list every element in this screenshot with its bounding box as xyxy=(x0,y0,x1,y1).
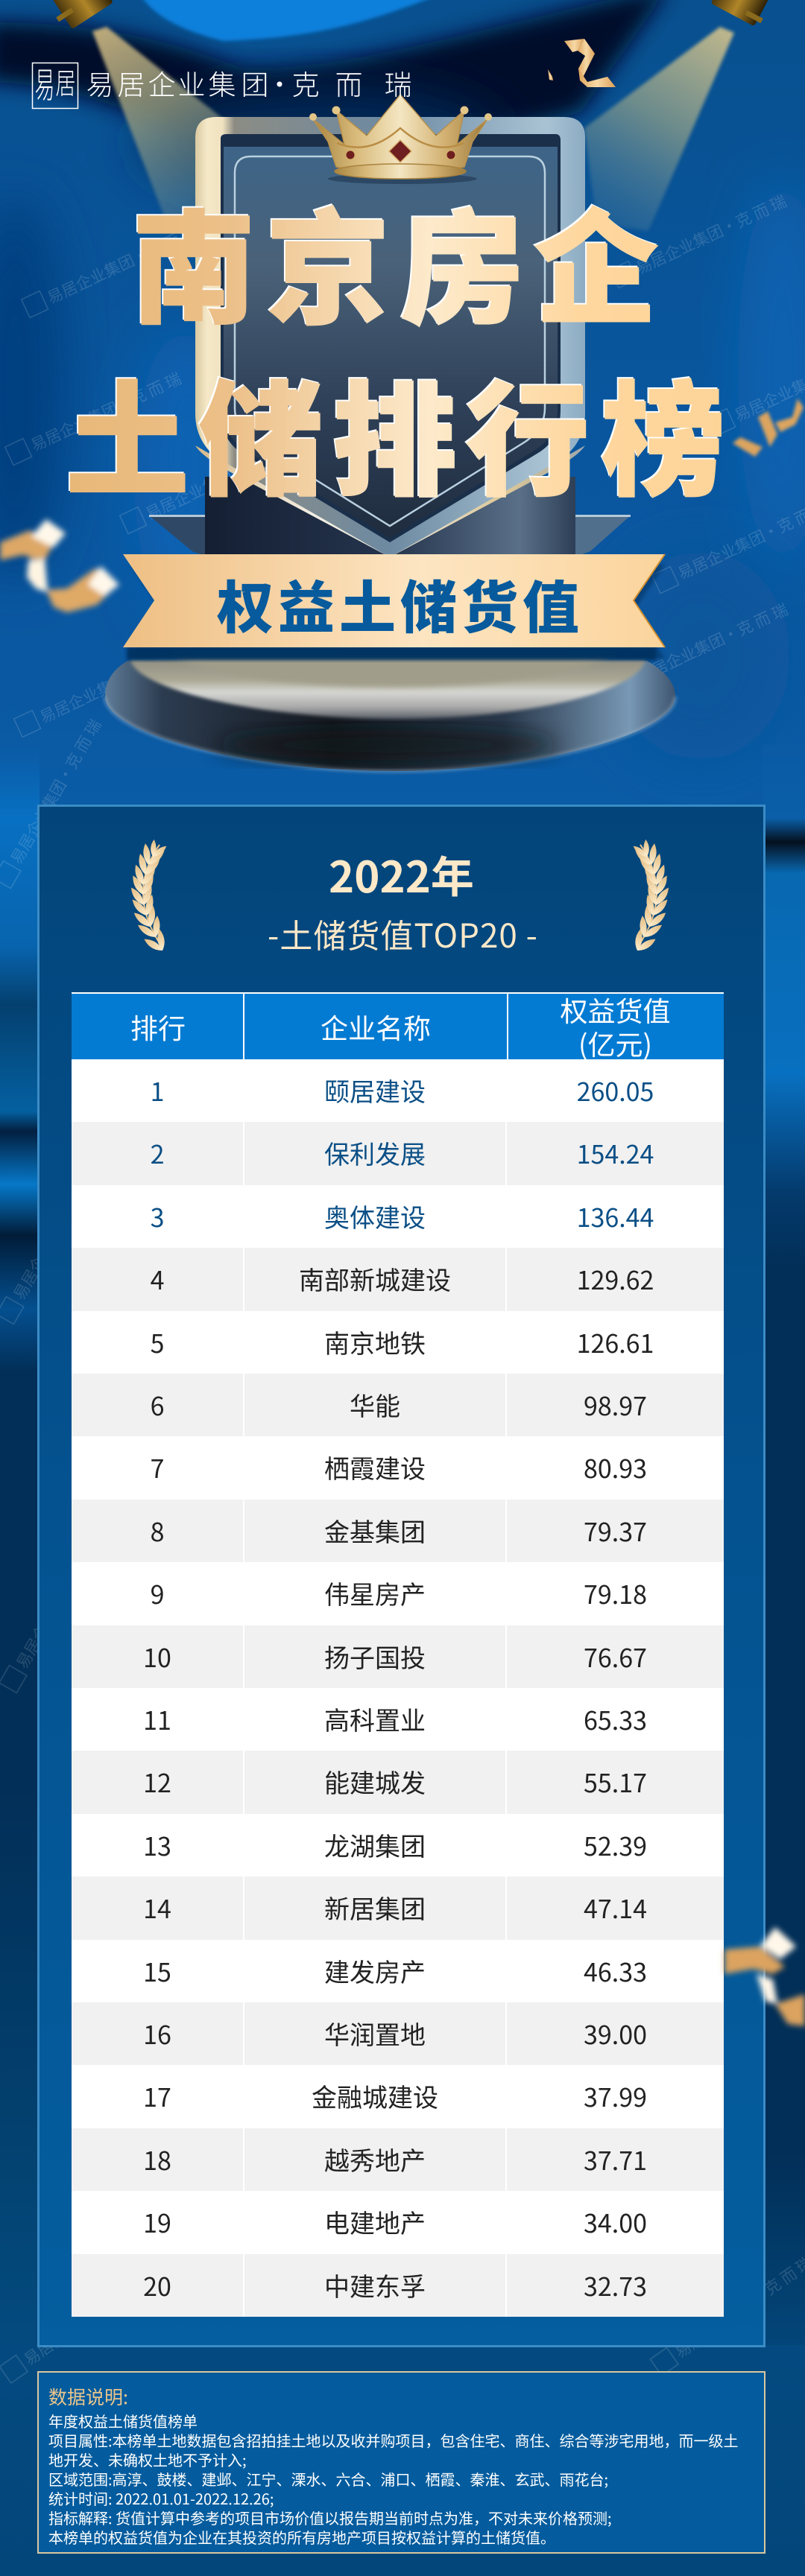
icon: right laurel xyxy=(632,840,672,954)
row 13 xyxy=(143,1827,647,1863)
notes line 4: 区域范围:高淳、鼓楼、建邺、江宁、溧水、六合、浦口、栖霞、秦淮、玄武、雨花台; xyxy=(48,2468,608,2490)
row 19 xyxy=(143,2204,647,2240)
logo xyxy=(33,57,411,109)
row 14: 47.14 xyxy=(584,1889,647,1926)
row 4 xyxy=(72,1248,724,1311)
row 1 xyxy=(151,1072,654,1108)
notes line 7: 本榜单的权益货值为企业在其投资的所有房地产项目按权益计算的土储货值。 xyxy=(48,2526,555,2548)
row 15: 建发房产 xyxy=(324,1952,426,1989)
data notes xyxy=(37,2371,765,2554)
row 20: 中建东孚 xyxy=(324,2267,426,2303)
row 13: 52.39 xyxy=(584,1827,647,1863)
row 17: 17 xyxy=(143,2078,171,2114)
table header: 权益货值 xyxy=(561,989,671,1030)
row 20 xyxy=(72,2254,724,2317)
row 16 xyxy=(72,2002,724,2065)
row 10 xyxy=(72,1625,724,1688)
row 10: 扬子国投 xyxy=(324,1638,426,1675)
row 12: 能建城发 xyxy=(324,1763,426,1800)
row 1: 1 xyxy=(151,1072,164,1108)
row 5: 126.61 xyxy=(577,1324,654,1360)
fabric background: side margins and bottom xyxy=(0,745,805,2576)
row 8 xyxy=(72,1500,724,1562)
row 12 xyxy=(72,1751,724,1814)
row 18: 18 xyxy=(143,2141,171,2177)
subtitle: -土储货值TOP20 - xyxy=(268,910,538,957)
row 3: 3 xyxy=(151,1198,164,1234)
ranking table xyxy=(72,992,724,2317)
confetti ribbon: right xyxy=(733,399,804,457)
row 15: 46.33 xyxy=(584,1952,647,1989)
confetti ribbon: top right xyxy=(548,39,616,87)
table header: 企业名称 xyxy=(321,1006,431,1046)
left spotlight lamp xyxy=(51,0,113,29)
row 6: 华能 xyxy=(350,1386,400,1423)
notes line 6: 指标解释: 货值计算中参考的项目市场价值以报告期当前时点为准，不对未来价格预测; xyxy=(48,2507,612,2528)
main panel xyxy=(37,805,765,2347)
row 17: 37.99 xyxy=(584,2078,647,2114)
row 6 xyxy=(72,1374,724,1436)
row 7 xyxy=(151,1449,647,1485)
row 13: 13 xyxy=(143,1827,171,1863)
row 4: 129.62 xyxy=(577,1260,654,1297)
confetti ribbon: left xyxy=(0,519,119,612)
row 1: 260.05 xyxy=(577,1072,654,1108)
row 14: 14 xyxy=(143,1889,171,1926)
row 17 xyxy=(143,2078,647,2114)
row 19: 19 xyxy=(143,2204,171,2240)
row 7: 80.93 xyxy=(584,1449,647,1485)
row 4: 4 xyxy=(151,1260,164,1297)
row 2 xyxy=(72,1122,724,1185)
row 11: 11 xyxy=(143,1701,171,1737)
icon: left laurel xyxy=(128,840,168,954)
row 3 xyxy=(151,1198,654,1234)
row 19: 34.00 xyxy=(584,2204,647,2240)
title xyxy=(66,169,725,521)
row 9: 9 xyxy=(151,1575,164,1611)
notes line 5: 统计时间: 2022.01.01-2022.12.26; xyxy=(48,2487,274,2509)
row 10: 76.67 xyxy=(584,1638,647,1675)
banner text: 权益土储货值 xyxy=(217,562,579,644)
row 7: 7 xyxy=(151,1449,164,1485)
title line 1: 南京房企 xyxy=(132,169,658,349)
row 16: 华润置地 xyxy=(324,2015,426,2052)
row 8: 金基集团 xyxy=(324,1512,426,1549)
logo mark: 易 xyxy=(34,57,55,109)
row 13: 龙湖集团 xyxy=(324,1827,426,1863)
row 11: 高科置业 xyxy=(324,1701,426,1737)
row 18 xyxy=(72,2128,724,2191)
row 18: 越秀地产 xyxy=(324,2141,426,2177)
row 20: 32.73 xyxy=(584,2267,647,2303)
row 15: 15 xyxy=(143,1952,171,1989)
row 18: 37.71 xyxy=(584,2141,647,2177)
row 2: 2 xyxy=(151,1135,164,1171)
row 7: 栖霞建设 xyxy=(324,1449,426,1485)
row 15 xyxy=(143,1952,647,1989)
row 11 xyxy=(143,1701,647,1737)
row 2: 保利发展 xyxy=(324,1135,426,1171)
notes line 3: 地开发、未确权土地不予计入; xyxy=(48,2449,247,2470)
row 5: 5 xyxy=(151,1324,164,1360)
fabric background: hero xyxy=(0,0,805,812)
trophy pedestal xyxy=(105,647,675,771)
notes line 2: 项目属性:本榜单土地数据包含招拍挂土地以及收并购项目，包含住宅、商住、综合等涉宅用地，而一级土 xyxy=(48,2429,739,2451)
row 9 xyxy=(151,1575,647,1611)
row 14 xyxy=(72,1877,724,1940)
row 8: 8 xyxy=(151,1512,164,1549)
shield base pillar xyxy=(205,477,575,559)
row 19: 电建地产 xyxy=(324,2204,426,2240)
row 9: 79.18 xyxy=(584,1575,647,1611)
shield wings xyxy=(149,515,631,559)
title line 2: 土储排行榜 xyxy=(66,341,725,521)
row 5: 南京地铁 xyxy=(324,1324,426,1360)
row 12: 12 xyxy=(143,1763,171,1800)
logo wordmark: 易居企业集团·克而瑞 xyxy=(86,63,411,103)
ribbon banner xyxy=(123,554,665,659)
right spotlight lamp xyxy=(710,0,772,26)
row 5 xyxy=(151,1324,654,1360)
row 8: 79.37 xyxy=(584,1512,647,1549)
notes heading: 数据说明: xyxy=(48,2383,128,2410)
row 12: 55.17 xyxy=(584,1763,647,1800)
spotlight beams xyxy=(92,27,734,231)
row 3: 奥体建设 xyxy=(324,1198,426,1234)
row 6: 6 xyxy=(151,1386,164,1423)
shield xyxy=(195,117,585,557)
row 14: 新居集团 xyxy=(324,1889,426,1926)
row 1: 颐居建设 xyxy=(324,1072,426,1108)
row 2: 154.24 xyxy=(577,1135,654,1171)
row 16: 16 xyxy=(143,2015,171,2052)
year heading: 2022年 xyxy=(329,843,474,905)
notes line 1: 年度权益土储货值榜单 xyxy=(48,2410,198,2431)
crown xyxy=(309,95,492,184)
row 17: 金融城建设 xyxy=(312,2078,438,2114)
table header: 排行 xyxy=(130,1006,186,1046)
row 10: 10 xyxy=(143,1638,171,1675)
logo mark: 居 xyxy=(56,60,75,103)
row 11: 65.33 xyxy=(584,1701,647,1737)
logo mark xyxy=(33,57,78,109)
row 20: 20 xyxy=(143,2267,171,2303)
table header xyxy=(72,992,724,1059)
row 9: 伟星房产 xyxy=(324,1575,426,1611)
row 16: 39.00 xyxy=(584,2015,647,2052)
row 4: 南部新城建设 xyxy=(299,1260,451,1297)
row 3: 136.44 xyxy=(577,1198,654,1234)
table header: (亿元) xyxy=(578,1023,652,1063)
row 6: 98.97 xyxy=(584,1386,647,1423)
